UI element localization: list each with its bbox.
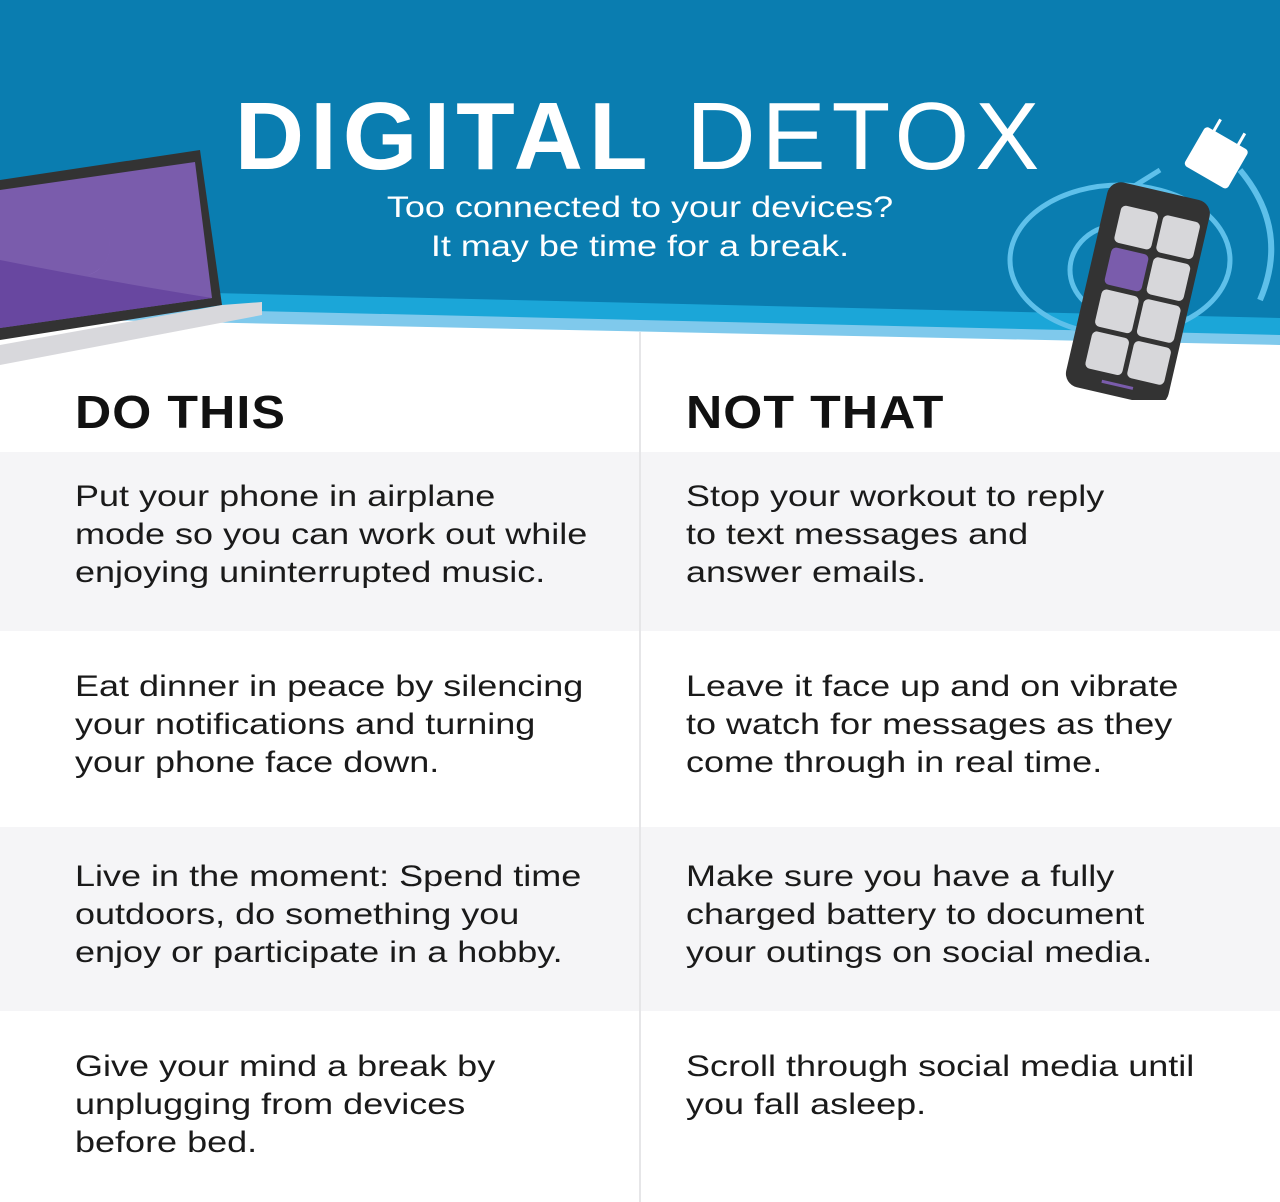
subtitle — [387, 191, 893, 263]
header background — [0, 0, 1280, 345]
heading: do this: DO THIS — [75, 386, 286, 438]
text: do 2: Eat dinner in peace by silencing — [75, 670, 583, 703]
text: not 3 — [686, 860, 1152, 969]
text: not 1: Stop your workout to reply — [686, 480, 1104, 513]
text: not 2: Leave it face up and on vibrate — [686, 670, 1178, 703]
subtitle: Too connected to your devices? — [387, 191, 893, 224]
text: do 4: before bed. — [75, 1126, 257, 1159]
text: do 3: enjoy or participate in a hobby. — [75, 936, 563, 969]
row backgrounds — [0, 452, 1280, 631]
text: do 4: unplugging from devices — [75, 1088, 465, 1121]
text: not 4: Scroll through social media until — [686, 1050, 1194, 1083]
text: not 1: to text messages and — [686, 518, 1028, 551]
text: not 1: answer emails. — [686, 556, 926, 589]
text: do 2 — [75, 670, 583, 779]
text: not 2 — [686, 670, 1178, 779]
text: not 2: come through in real time. — [686, 746, 1102, 779]
text: not 2: to watch for messages as they — [686, 708, 1172, 741]
text: do 4: Give your mind a break by — [75, 1050, 495, 1083]
text: do 1: enjoying uninterrupted music. — [75, 556, 545, 589]
subtitle: It may be time for a break. — [431, 230, 849, 263]
text: not 3: charged battery to document — [686, 898, 1144, 931]
text: do 1: mode so you can work out while — [75, 518, 587, 551]
text: not 4: you fall asleep. — [686, 1088, 926, 1121]
icon: laptop — [0, 150, 262, 365]
text: not 4 — [686, 1050, 1194, 1121]
text: do 1 — [75, 480, 587, 589]
text: not 1 — [686, 480, 1104, 589]
text: not 3: your outings on social media. — [686, 936, 1152, 969]
text: do 2: your notifications and turning — [75, 708, 535, 741]
icon: phone with charger — [1008, 118, 1274, 400]
text: do 3: Live in the moment: Spend time — [75, 860, 581, 893]
text: do 3: outdoors, do something you — [75, 898, 519, 931]
text: do 1: Put your phone in airplane — [75, 480, 495, 513]
text: not 3: Make sure you have a fully — [686, 860, 1114, 893]
heading: not that: NOT THAT — [686, 386, 944, 438]
text: do 4 — [75, 1050, 496, 1159]
title: DIGITAL DETOX — [235, 83, 1045, 190]
text: do 2: your phone face down. — [75, 746, 439, 779]
text: do 3 — [75, 860, 581, 969]
